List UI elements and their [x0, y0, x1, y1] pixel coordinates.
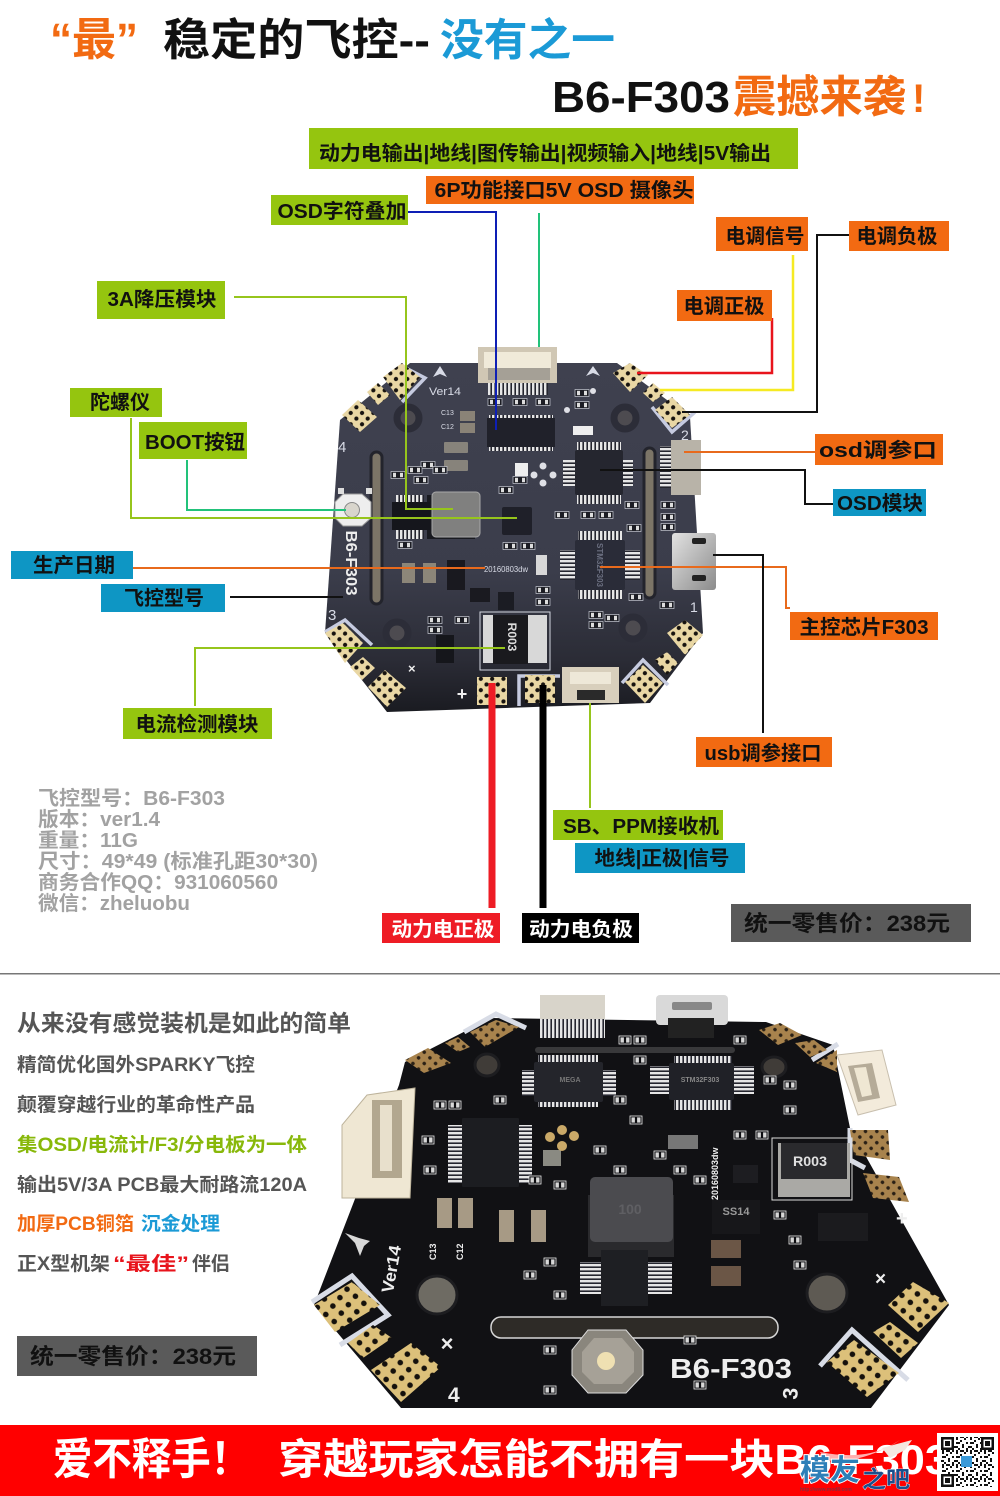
title line two: 震撼来袭: [733, 73, 906, 122]
callout leader lines: [131, 212, 849, 908]
QR code: [937, 1433, 998, 1491]
callout: ground positive signal: 地线|正极|信号: [594, 847, 730, 870]
panel: flight controller board top view: [325, 347, 716, 712]
gyro chip: [502, 507, 532, 535]
board silkscreen: C12: [455, 1243, 465, 1260]
spec text block: 重量：11G: [38, 829, 138, 852]
board silkscreen: ×: [408, 661, 416, 676]
callout: SBUS PPM receiver: [553, 810, 723, 840]
chip: OSD QFP: [522, 1055, 616, 1107]
mounting holes: [417, 1054, 847, 1314]
callout: current sensor: 电流检测模块: [136, 712, 258, 736]
title line two: !: [912, 77, 925, 121]
board silkscreen: B6-F303: [670, 1353, 792, 1384]
spec text block: 微信：zheluobu: [38, 892, 190, 915]
banner text: [53, 1435, 950, 1484]
callout: 3A regulator: [97, 281, 225, 319]
callout: battery negative: [522, 913, 639, 943]
callout: ESC positive: 电调正极: [684, 295, 764, 318]
mounting holes: [386, 407, 644, 644]
long slot: [491, 1317, 778, 1338]
callout: power and video pinout: [309, 128, 798, 169]
callout: SBUS PPM receiver: SB、PPM接收机: [563, 815, 719, 838]
board silkscreen: ×: [441, 1331, 453, 1356]
dark gold pads: [405, 1020, 909, 1202]
callout: production date: 生产日期: [33, 554, 115, 577]
current shunt R003: R003: [793, 1153, 827, 1169]
spec text block: [38, 787, 318, 915]
marketing text block: “最佳”: [113, 1253, 189, 1275]
marketing text block: 输出5V/3A PCB最大耐路流120A: [17, 1173, 307, 1196]
watermark: model forum logo: http://www.mod8.com: [800, 1487, 852, 1493]
banner: [0, 1425, 1000, 1496]
marketing text block: 加厚PCB铜箔: [17, 1213, 134, 1235]
board silkscreen: 3: [779, 1387, 803, 1400]
board silkscreen: 20160803dw: [710, 1146, 720, 1200]
current shunt R003: [772, 1138, 852, 1200]
chip: OSD TSSOP: [487, 415, 555, 451]
chip: OSD QFP: [563, 442, 633, 504]
callout: ESC positive: [677, 290, 772, 321]
marketing text block: [17, 1010, 351, 1275]
spec text block: 尺寸：49*49 (标准孔距30*30): [38, 850, 318, 873]
regulator U71: [818, 1213, 868, 1241]
price tag top: [731, 904, 971, 942]
board silkscreen: [328, 366, 698, 704]
watermark: model forum logo: [800, 1440, 912, 1493]
motor pads: [325, 363, 703, 707]
title line one: [50, 14, 615, 65]
callout: OSD module: OSD模块: [837, 492, 923, 515]
callout: battery positive: 动力电正极: [392, 918, 494, 941]
callout: 6P interface: 6P功能接口5V OSD 摄像头: [434, 179, 694, 202]
callout: ESC negative: 电调负极: [856, 225, 938, 248]
marketing text block: 沉金处理: [141, 1212, 220, 1235]
callout: OSD tuning port: [815, 434, 943, 465]
slots: [371, 448, 655, 604]
connector right: [837, 1050, 896, 1115]
marketing text block: 集OSD/电流计/F3/分电板为一体: [17, 1134, 307, 1156]
marketing text block: 颠覆穿越行业的革命性产品: [17, 1093, 255, 1116]
title line two: B6-F303: [552, 73, 730, 122]
price tag bottom: [17, 1336, 257, 1376]
callout: main chip: 主控芯片F303: [800, 616, 928, 639]
regulator chip: [392, 495, 430, 539]
callout: power and video pinout: 动力电输出|地线|图传输出|视频输入|地线|5V输出: [319, 142, 771, 165]
chip: diode SS14: SS14: [723, 1206, 750, 1218]
callout: main chip: [790, 612, 938, 640]
callout: ESC signal: [716, 217, 808, 251]
boot button: [572, 1330, 643, 1393]
board silkscreen: 2: [681, 427, 689, 443]
board silkscreen: [345, 1146, 908, 1407]
current shunt R003: [480, 612, 550, 670]
micro USB: [656, 995, 728, 1038]
watermark: model forum logo: 之吧: [862, 1466, 910, 1492]
title line one: “最”: [50, 14, 138, 65]
connector J4 top: [478, 347, 557, 395]
connector right: [660, 440, 701, 495]
inductor: [588, 1177, 674, 1257]
board outline: [325, 363, 703, 712]
banner text: 爱不释手！: [53, 1435, 250, 1484]
board silkscreen: C12: [441, 424, 454, 431]
marketing text block: 精简优化国外SPARKY飞控: [17, 1053, 255, 1076]
chip: STM32F303: [560, 531, 640, 599]
board silkscreen: Ver14: [429, 386, 461, 398]
callout: 3A regulator: 3A降压模块: [108, 288, 216, 311]
board silkscreen: 4: [338, 439, 346, 456]
board silkscreen: 1: [690, 599, 698, 615]
chip: SO8: [580, 1250, 672, 1306]
callout: ESC signal: 电调信号: [726, 225, 804, 248]
callout: model number: [101, 584, 225, 612]
callout: gyro: 陀螺仪: [90, 390, 150, 414]
chip: TSSOP: [448, 1118, 532, 1187]
current shunt R003: R003: [505, 623, 519, 652]
gold pads: [314, 1282, 949, 1402]
banner text: 穿越玩家怎能不拥有一块B6-F303: [278, 1436, 950, 1483]
chip: diode SS14: [712, 1200, 760, 1234]
board outline: [314, 1018, 949, 1408]
marketing text block: 正X型机架: [17, 1253, 110, 1275]
white corner markers: [312, 1014, 908, 1380]
chip: U5: [733, 1165, 758, 1183]
boot button: [335, 488, 372, 526]
inductor: 100: [618, 1201, 642, 1217]
board silkscreen: C13: [428, 1243, 438, 1260]
marketing text block: 伴侣: [192, 1253, 230, 1275]
board silkscreen: 3: [328, 607, 336, 624]
ceramic capacitors: [437, 1198, 741, 1286]
spec text block: 商务合作QQ：931060560: [38, 871, 278, 894]
board silkscreen: +: [896, 1208, 908, 1230]
title line one: 稳定的飞控--: [163, 16, 430, 65]
connector top: [540, 995, 605, 1038]
price tag bottom: 统一零售价：238元: [30, 1344, 236, 1369]
callout: BOOT button: BOOT按钮: [145, 431, 245, 454]
callout: current sensor: [123, 708, 272, 739]
micro USB: [672, 533, 716, 590]
watermark: model forum logo: 模友: [800, 1454, 860, 1487]
callout: USB tuning port: [696, 737, 832, 767]
callout: production date: [11, 551, 133, 579]
board silkscreen: B6-F303: [342, 530, 359, 596]
board silkscreen: 4: [448, 1384, 460, 1407]
chip: STM32: [650, 1056, 754, 1110]
connector J3: [562, 667, 619, 703]
board silkscreen: ×: [875, 1269, 886, 1290]
white corner markers: [325, 365, 695, 706]
callout: gyro: [70, 388, 162, 417]
callout: OSD tuning port: osd调参口: [819, 438, 937, 462]
section divider: [0, 973, 1000, 974]
chip: STM32: STM32F303: [681, 1077, 719, 1084]
callout: battery positive: [382, 913, 500, 943]
callout: OSD overlay: [271, 195, 408, 225]
board silkscreen: 20160803dw: [484, 565, 528, 574]
callout: USB tuning port: usb调参接口: [704, 741, 822, 765]
spec text block: 飞控型号：B6-F303: [38, 787, 225, 810]
inductor: [427, 492, 480, 539]
board silkscreen: +: [457, 684, 467, 704]
small components: [391, 388, 675, 663]
callout: ground positive signal: [575, 843, 745, 873]
callout: battery negative: 动力电负极: [529, 918, 633, 941]
chip: OSD QFP: MEGA: [560, 1077, 580, 1084]
board silkscreen: C13: [441, 410, 454, 417]
marketing text block: 从来没有感觉装机是如此的简单: [17, 1010, 351, 1036]
board silkscreen: Ver14: [378, 1243, 405, 1294]
panel: board perspective photo: [312, 995, 949, 1408]
callout: ESC negative: [849, 221, 949, 251]
spec text block: 版本：ver1.4: [38, 808, 161, 831]
title line two: [552, 73, 925, 122]
callout: model number: 飞控型号: [124, 587, 204, 610]
callout: OSD overlay: OSD字符叠加: [278, 199, 406, 223]
edge-on top slot: [535, 1047, 735, 1053]
chip: STM32F303: STM32F303: [595, 543, 604, 588]
price tag top: 统一零售价：238元: [744, 911, 950, 936]
small components: [422, 1036, 806, 1394]
callout: BOOT button: [139, 422, 247, 459]
title line one: 没有之一: [440, 16, 615, 65]
connector left: [342, 1088, 415, 1198]
